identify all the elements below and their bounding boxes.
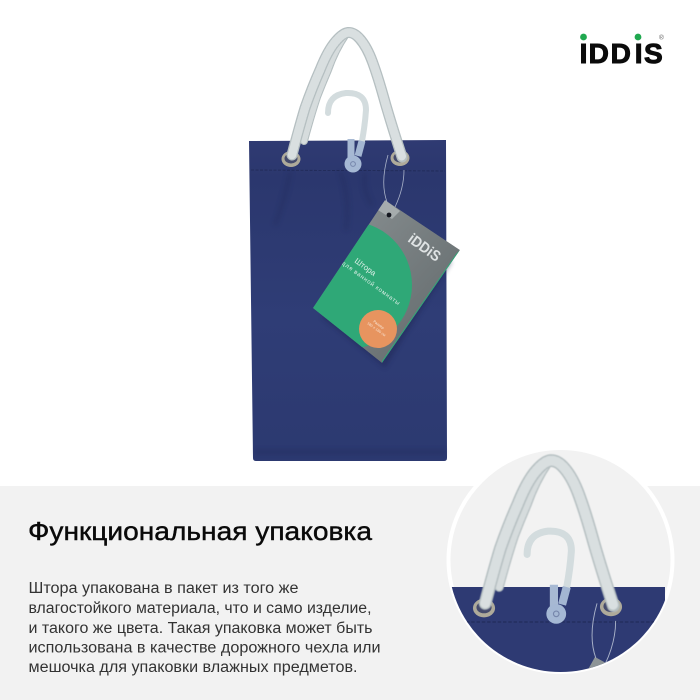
body text: мешочка для упаковки влажных предметов. [28,659,358,676]
detail circle: zoomed handle [448,448,672,673]
tag logo: iDDiS [405,230,444,265]
logo registered mark: ® [659,34,664,42]
tag title: для ванной комнаты [340,260,401,307]
body text: использована в качестве дорожного чехла или [28,640,380,656]
heading: Функциональная упаковка [28,516,373,546]
tag highlight [378,200,400,219]
iddis logo [580,34,664,69]
right grommet [390,150,410,166]
tag grey face [313,200,460,363]
plastic hook [328,93,366,172]
circle frame [448,448,672,672]
rope handle [292,32,402,157]
tag shadow [322,215,452,368]
body text: влагостойкого материала, что и само изделие, [28,600,372,617]
logo dot left [580,34,587,40]
product: bag with tag [249,140,460,461]
tag green lower edge [382,250,460,363]
bag body [249,140,447,461]
left grommet [282,151,300,167]
tag orange badge [359,310,397,348]
bag seam [251,170,445,171]
tag badge text: Размер [372,320,385,330]
bag wrinkles [255,172,445,452]
handles: rope, grommets, hook [282,32,410,207]
tag green circle [313,224,412,348]
background band [0,486,700,700]
tag wire loop [384,155,404,207]
zoomed bag top [450,461,665,673]
tag eyelet [387,213,391,217]
logo wordmark: IDDIS [580,38,663,69]
body text [28,580,380,676]
tag badge text: 180 x 180 см [366,321,387,338]
body text: Штора упакована в пакет из того же [28,580,298,597]
hang tag [313,200,460,363]
logo dot right [635,34,641,40]
body text: и такого же цвета. Такая упаковка может быть [28,620,372,637]
tag title: Штора [353,256,378,278]
